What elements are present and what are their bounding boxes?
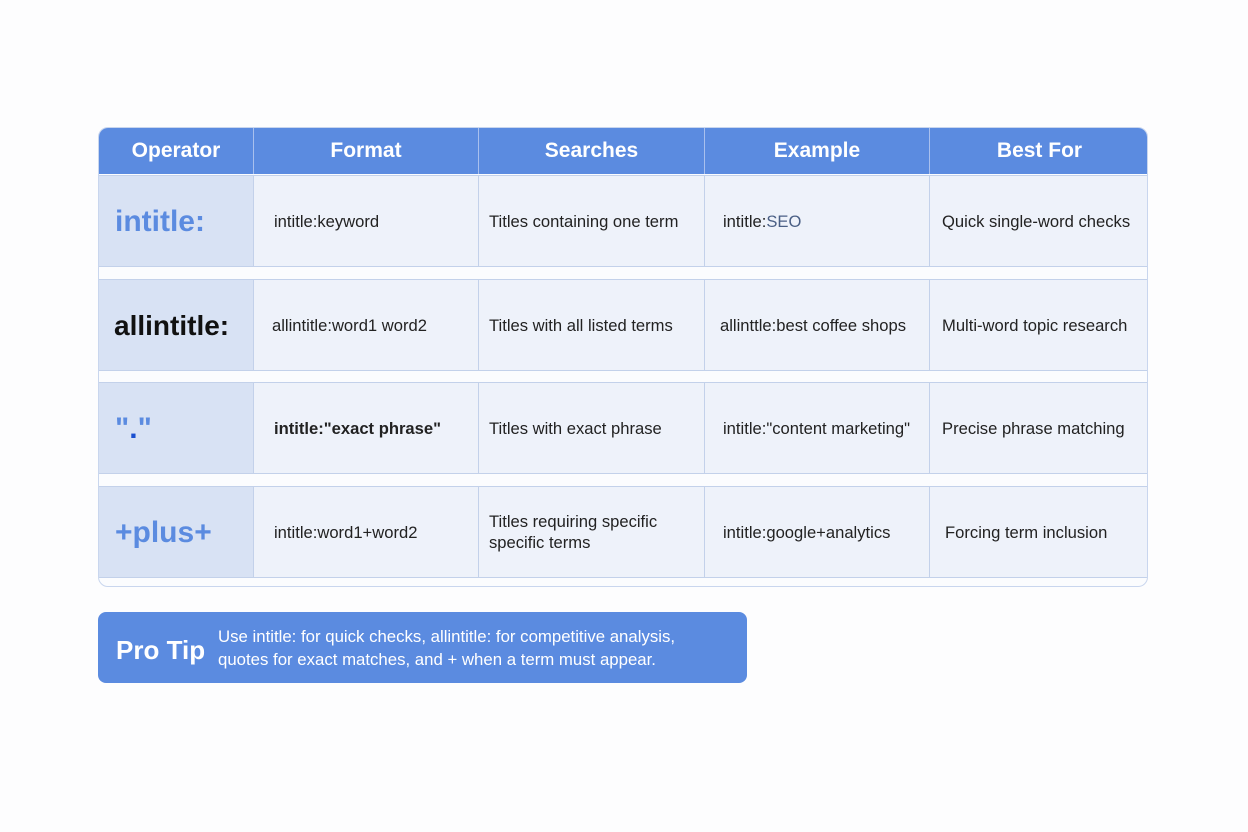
row: allintitle: allintitle: — [114, 310, 229, 340]
row: exact phrase: " " — [115, 412, 152, 444]
row: exact phrase: Precise phrase matching — [942, 418, 1125, 438]
header row: Format — [330, 139, 402, 162]
row: exact phrase: . — [129, 412, 138, 444]
callout: pro tip — [98, 612, 747, 683]
row: plus: Titles requiring specific — [489, 512, 657, 531]
pro tip label: Pro Tip — [116, 635, 205, 665]
header row — [99, 128, 1149, 174]
row: plus: specific terms — [489, 533, 590, 552]
pro tip text: quotes for exact matches, and + when a term must appear. — [218, 650, 656, 669]
row: allintitle: allintitle:word1 word2 — [272, 316, 427, 334]
row: intitle: intitle:keyword — [274, 212, 379, 230]
row: intitle: intitle: — [115, 204, 205, 238]
row: plus — [99, 486, 1149, 578]
table — [98, 127, 1148, 587]
pro tip text: Use intitle: for quick checks, allintitle: for competitive analysis, — [218, 627, 675, 646]
pro tip text — [218, 627, 675, 669]
row: allintitle — [99, 279, 1149, 371]
row: plus: intitle:word1+word2 — [274, 522, 417, 542]
row: intitle: Quick single-word checks — [942, 212, 1130, 230]
row: intitle: intitle: — [723, 212, 766, 230]
row: exact phrase — [99, 382, 1149, 474]
header row: Searches — [545, 139, 638, 162]
header row: Operator — [132, 139, 220, 162]
row: intitle: Titles containing one term — [489, 212, 678, 230]
row: intitle — [99, 175, 1149, 267]
row: exact phrase: Titles with exact phrase — [489, 418, 662, 438]
row: intitle: SEO — [766, 212, 801, 230]
row: plus: +plus+ — [115, 516, 212, 548]
row: allintitle: Titles with all listed terms — [489, 316, 673, 334]
row: exact phrase: intitle:"exact phrase" — [274, 418, 441, 438]
row: exact phrase: intitle:"content marketing" — [723, 418, 910, 438]
row: allintitle: allinttle:best coffee shops — [720, 316, 906, 334]
row: allintitle: Multi-word topic research — [942, 316, 1127, 334]
header row: Example — [774, 139, 860, 162]
row: plus: intitle:google+analytics — [723, 522, 890, 542]
row: plus: Forcing term inclusion — [945, 522, 1107, 542]
header row: Best For — [997, 139, 1082, 162]
